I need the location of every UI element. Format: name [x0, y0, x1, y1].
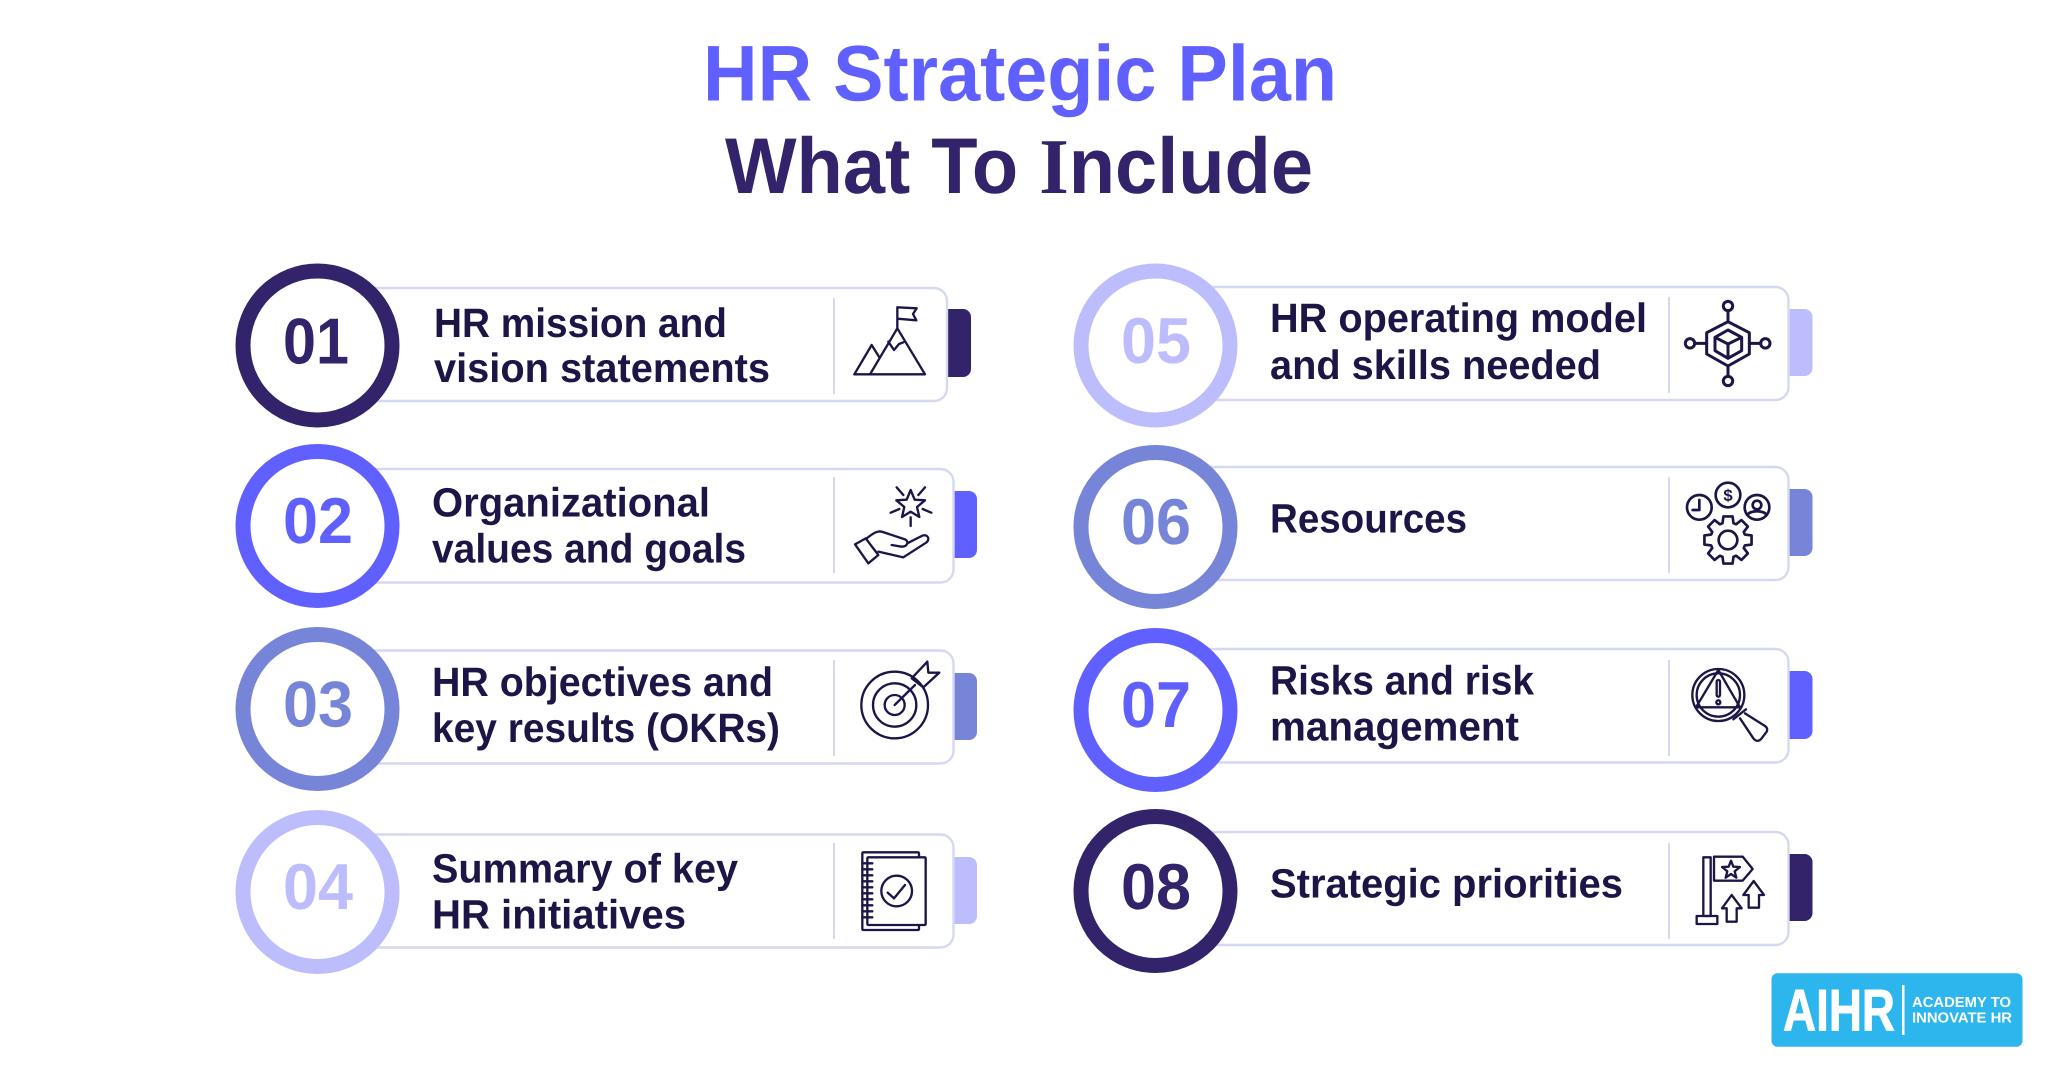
- icon: target with arrow: [861, 662, 939, 738]
- panel: item 01: [243, 271, 971, 420]
- panel: item 08: 08: [1121, 850, 1191, 923]
- panel: item 04: Summary of key: [432, 846, 738, 892]
- icon: clock, dollar, person and gear: [1687, 483, 1769, 564]
- panel: item 03: key results (OKRs): [432, 705, 780, 751]
- panel: item 07: 07: [1121, 668, 1191, 741]
- logo: AIHR: INNOVATE HR: [1912, 1011, 2013, 1027]
- icon: hand with star: [855, 487, 931, 563]
- logo: AIHR: AIHR: [1783, 978, 1895, 1044]
- panel: item 07: [1081, 636, 1812, 784]
- panel: item 08: [1081, 816, 1812, 966]
- panel: item 04: 04: [283, 850, 353, 923]
- icon: clock, dollar, person and gear: $: [1723, 486, 1733, 505]
- panel: item 03: 03: [283, 668, 353, 741]
- icon: magnifier with warning triangle: [1692, 669, 1767, 741]
- panel: item 06: 06: [1121, 485, 1191, 558]
- icon: notebook with check mark: [862, 852, 926, 930]
- logo: AIHR: [1772, 973, 2022, 1047]
- panel: item 01: HR mission and: [434, 300, 727, 346]
- panel: item 05: 05: [1121, 304, 1191, 377]
- panel: item 02: values and goals: [432, 526, 746, 572]
- icon: flag with star and up arrows: [1697, 857, 1764, 924]
- panel: item 02: 02: [283, 484, 353, 557]
- panel: item 01: vision statements: [434, 345, 770, 391]
- panel: item 07: management: [1270, 704, 1519, 750]
- panel: item 04: [243, 818, 977, 966]
- icon: hexagon cube network: [1685, 301, 1770, 386]
- panel: item 05: [1081, 271, 1812, 420]
- icon: mountain with flag: [854, 307, 925, 374]
- panel: item 07: Risks and risk: [1270, 657, 1534, 703]
- panel: item 04: HR initiatives: [432, 892, 686, 938]
- panel: item 05: HR operating model: [1270, 295, 1647, 341]
- panel: item 06: Resources: [1270, 496, 1467, 542]
- title: [703, 28, 1337, 211]
- panel: item 06: [1081, 452, 1812, 602]
- panel: item 05: and skills needed: [1270, 342, 1601, 388]
- panel: item 03: HR objectives and: [432, 659, 773, 705]
- panel: item 08: Strategic priorities: [1270, 861, 1623, 907]
- logo: AIHR: ACADEMY TO: [1912, 995, 2011, 1011]
- panel: item 02: [243, 452, 977, 600]
- panel: item 01: 01: [283, 304, 349, 377]
- title: HR Strategic Plan: [703, 28, 1337, 118]
- panel: item 02: Organizational: [432, 480, 710, 526]
- panel: item 03: [243, 634, 977, 784]
- title: What To Include: [725, 121, 1313, 211]
